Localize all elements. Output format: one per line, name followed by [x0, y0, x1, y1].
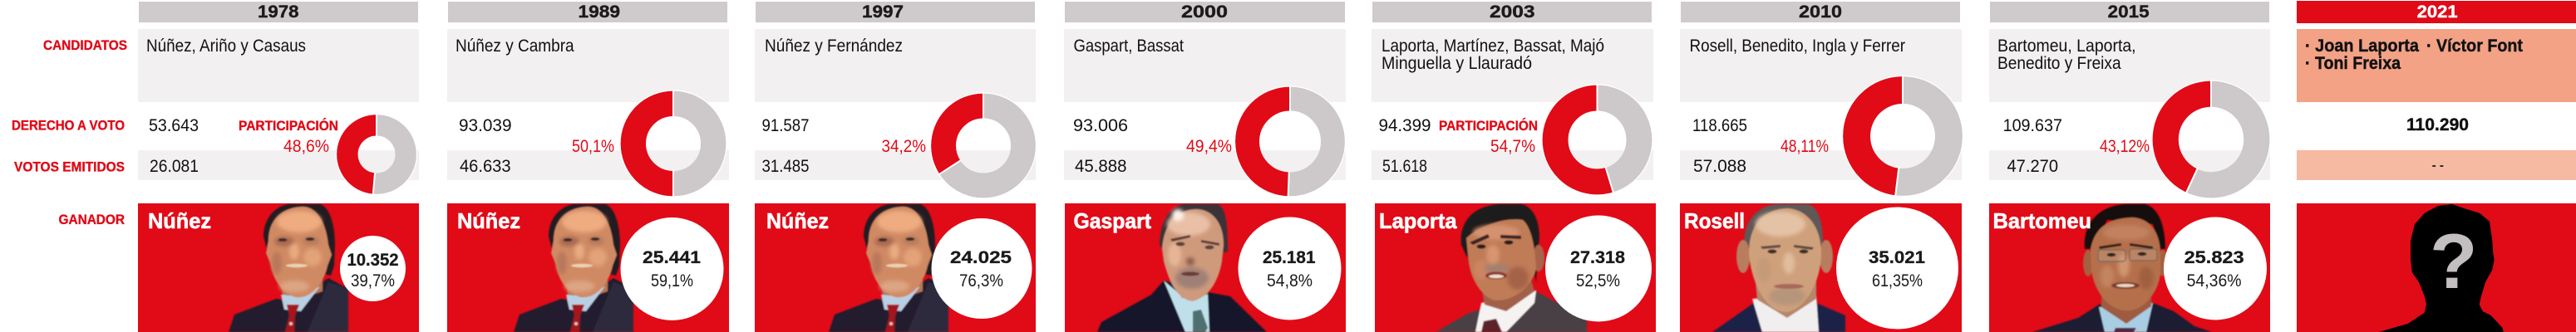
participation 1989: 50,1% [572, 137, 614, 156]
votes band 1997: 31.485 [761, 157, 810, 176]
donut 1978: 48.6% [336, 114, 417, 195]
votes band 1989 [447, 116, 729, 180]
candidates 2015 [1989, 29, 2270, 102]
column: 1978 [138, 2, 419, 332]
column: 2000 [1064, 2, 1346, 332]
participation label 1978: 48,6% [283, 137, 329, 156]
votes bubble 1978: 39,7% [351, 271, 395, 290]
votes bubble 1989 [620, 217, 723, 320]
votes band 1989: 93.039 [459, 116, 512, 135]
participation 1997: 34,2% [881, 137, 926, 156]
votes bubble 2000 [1239, 217, 1342, 320]
column: 2015 [1989, 2, 2270, 332]
year header 2003 [1372, 2, 1652, 22]
participation 2015: 43,12% [2100, 137, 2150, 156]
votes band 2000: 45.888 [1075, 157, 1127, 176]
name: Núñez: Núñez [766, 208, 829, 233]
year header 2000 [1065, 2, 1345, 22]
year header 1989 [448, 2, 727, 22]
label: candidatos: CANDIDATOS [43, 38, 127, 53]
year header 1997 [756, 2, 1035, 22]
votes band 2015 [1989, 116, 2270, 180]
votes band 2021: - - [2432, 159, 2444, 173]
donut 2015: 43.12% [2152, 80, 2270, 198]
votes band 2010 [1680, 116, 1962, 180]
candidates 2000 [1064, 29, 1346, 102]
year header 1978 [139, 2, 418, 22]
votes band 1997 [755, 116, 1036, 180]
votes band 2000: 93.006 [1073, 116, 1128, 135]
candidates 2003: Minguella y Llauradó [1382, 54, 1532, 73]
donut 1997: 34.2% [931, 91, 1036, 198]
participation label 2003: 54,7% [1490, 137, 1535, 156]
donut 1989: 50.1% [620, 90, 727, 198]
votes bubble 1997: 76,3% [959, 271, 1003, 290]
portrait: Núñez [514, 204, 633, 332]
votes bubble 2015: 25.823 [2184, 247, 2244, 267]
year header 2015 [1990, 2, 2269, 22]
votes band 2015: 109.637 [2003, 116, 2062, 135]
votes bubble 1978 [340, 236, 406, 301]
candidates 2003 [1372, 29, 1653, 102]
portrait: Núñez [229, 204, 348, 332]
candidates 2021: · Joan Laporta [2305, 36, 2420, 56]
winner panel 2003 [1375, 203, 1656, 332]
candidates 1997 [755, 29, 1036, 102]
candidates 2003: Laporta, Martínez, Bassat, Majó [1382, 37, 1604, 56]
name: Rosell: Rosell [1684, 208, 1745, 233]
votes bubble 2010 [1836, 208, 1958, 329]
name: Laporta: Laporta [1379, 208, 1457, 233]
votes band 1989: 46.633 [460, 157, 510, 176]
votes band 2003 [1372, 116, 1653, 180]
year header 1989: 1989 [579, 2, 620, 22]
candidates 1989 [447, 29, 729, 102]
donut 2000: 49.4% [1235, 85, 1345, 198]
portrait: Rosell [1712, 204, 1845, 332]
candidates 2021 [2297, 29, 2576, 102]
votes band 1978: 26.081 [150, 157, 199, 176]
name: Bartomeu: Bartomeu [1993, 208, 2091, 233]
column: 1989 [447, 2, 729, 332]
candidates 1978: Núñez, Ariño y Casaus [146, 37, 306, 56]
votes bubble 2015 [2164, 217, 2267, 320]
portrait: Laporta [1436, 204, 1587, 332]
year header 2000: 2000 [1181, 2, 1228, 22]
winner panel 2010 [1680, 203, 1962, 332]
winner panel 1997 [755, 203, 1036, 332]
winner panel 2000 [1065, 203, 1346, 332]
votes band 1978: 53.643 [149, 116, 199, 135]
portrait: Núñez [829, 204, 948, 332]
candidates 2015: Bartomeu, Laporta, [1997, 37, 2136, 56]
column: 2003 [1372, 2, 1656, 332]
votes bubble 1989: 59,1% [651, 271, 693, 290]
column: 1997 [755, 2, 1036, 332]
participation label 2003: PARTICIPACIÓN [1439, 118, 1538, 134]
votes band 2000 [1064, 116, 1346, 180]
votes bubble 1978: 10.352 [347, 250, 399, 270]
column: 2021 [2297, 1, 2576, 332]
votes band 2010: 57.088 [1693, 157, 1746, 176]
year header 2010 [1681, 2, 1960, 22]
participation label 1978 [239, 118, 338, 156]
participation 2010: 48,11% [1781, 137, 1829, 156]
participation label 1978: PARTICIPACIÓN [239, 118, 338, 134]
votes bubble 1989: 25.441 [643, 247, 701, 267]
winner panel 2021 [2297, 203, 2576, 332]
votes bubble 1997 [931, 218, 1032, 319]
participation label 2003 [1439, 118, 1538, 156]
votes bubble 2015: 54,36% [2187, 271, 2242, 290]
winner panel 1978 [138, 203, 419, 332]
name: Núñez: Núñez [457, 208, 520, 233]
candidates 1978 [138, 29, 419, 102]
name: Núñez: Núñez [148, 208, 211, 233]
label: ganador: GANADOR [58, 212, 125, 227]
portrait: Gaspart [1097, 204, 1267, 332]
votes bubble 2010: 61,35% [1872, 271, 1923, 290]
winner panel 2015 [1989, 203, 2270, 332]
votes bubble 2003 [1545, 216, 1652, 322]
year header 2021 [2297, 1, 2576, 23]
votes band 2010: 118.665 [1692, 116, 1747, 135]
donut 2010: 48.11% [1842, 75, 1963, 197]
votes band 2003: 94.399 [1378, 116, 1431, 135]
year header 1978: 1978 [258, 2, 299, 22]
label: derecho a voto: DERECHO A VOTO [12, 118, 125, 133]
donut 2003: 54.7% [1542, 83, 1652, 195]
candidates 2021: · Toni Freixa [2305, 53, 2401, 73]
year header 2003: 2003 [1490, 2, 1535, 22]
votes bubble 2000: 25.181 [1263, 247, 1316, 267]
year header 2015: 2015 [2108, 2, 2150, 22]
votes bubble 1997: 24.025 [950, 247, 1012, 267]
label: votos emitidos: VOTOS EMITIDOS [14, 159, 125, 174]
votes bubble 2003: 52,5% [1576, 271, 1620, 290]
votes bubble 2010: 35.021 [1869, 247, 1925, 267]
candidates 2010 [1680, 29, 1962, 102]
votes bubble 2000: 54,8% [1267, 271, 1313, 290]
year header 2021: 2021 [2417, 2, 2458, 22]
column: 2010 [1680, 2, 1963, 332]
icon: unknown silhouette [2379, 204, 2504, 332]
electorate 2021: 110.290 [2406, 115, 2469, 134]
portrait: Bartomeu [2032, 204, 2212, 332]
icon: question mark: ? [2430, 217, 2477, 305]
candidates 2021: · Víctor Font [2426, 36, 2523, 56]
votes bubble 2003: 27.318 [1570, 247, 1625, 267]
votes band 2003: 51.618 [1382, 157, 1427, 176]
candidates 2010: Rosell, Benedito, Ingla y Ferrer [1689, 37, 1905, 56]
candidates 2015: Benedito y Freixa [1997, 54, 2121, 73]
participation 2000: 49,4% [1186, 137, 1232, 156]
votes band 1978 [138, 116, 419, 180]
votes band 2015: 47.270 [2007, 157, 2058, 176]
votes band 2021 [2297, 150, 2576, 180]
name: Gaspart: Gaspart [1074, 208, 1151, 233]
year header 2010: 2010 [1799, 2, 1842, 22]
votes band 1997: 91.587 [761, 116, 810, 135]
winner panel 1989 [447, 203, 729, 332]
year header 1997: 1997 [862, 2, 904, 22]
candidates 2000: Gaspart, Bassat [1074, 37, 1184, 56]
candidates 1997: Núñez y Fernández [765, 37, 903, 56]
row labels [12, 38, 127, 227]
candidates 1989: Núñez y Cambra [456, 37, 574, 56]
